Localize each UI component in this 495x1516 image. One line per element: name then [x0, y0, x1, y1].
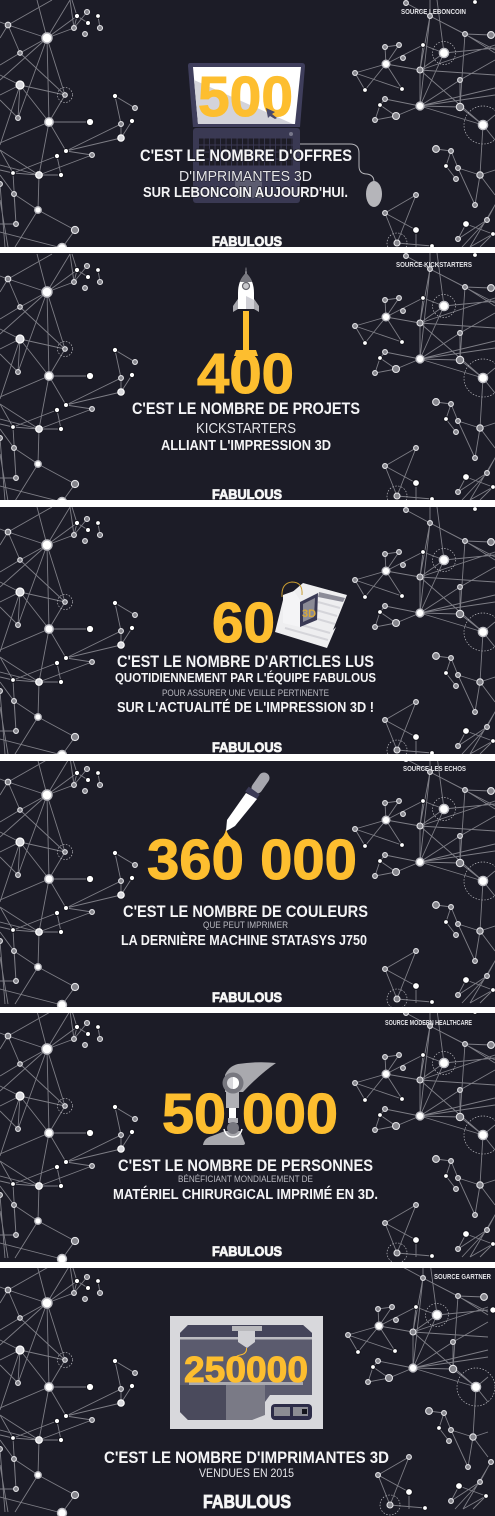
icon: prosthetic leg [203, 1062, 276, 1145]
text block: description: C'EST LE NOMBRE DE PROJETS [132, 400, 360, 418]
number: 250 000: 250000 [184, 1349, 308, 1390]
text block: description: ALLIANT L'IMPRESSION 3D [161, 438, 331, 454]
text block: description: QUOTIDIENNEMENT PAR L'ÉQUIPE FABULOUS [115, 670, 376, 685]
icon: newspaper with 3D printer: 3D [302, 608, 316, 620]
panel: 500 offers on Leboncoin [0, 0, 495, 253]
panel: 250 000 printers [0, 1262, 495, 1516]
text block: description [122, 906, 368, 945]
text block: description: MATÉRIEL CHIRURGICAL IMPRIMÉ EN 3D. [113, 1186, 378, 1203]
text block: description [114, 1160, 378, 1199]
icon: 3D printer [170, 1316, 323, 1429]
number: 60: 60 [212, 591, 275, 655]
text block: description [140, 147, 352, 201]
icon: dropper [219, 778, 264, 845]
icon: mouse cursor [266, 108, 277, 119]
text block: description: C'EST LE NOMBRE DE PERSONNES [118, 1157, 373, 1175]
logo: Fabulous: FABULOUS [203, 1492, 291, 1512]
text block: description: C'EST LE NOMBRE DE COULEURS [123, 903, 368, 921]
number: 400: 400 [197, 342, 294, 406]
source label: SOURCE LEBONCOIN [401, 7, 466, 16]
logo: Fabulous: FABULOUS [212, 233, 282, 249]
logo: Fabulous: FABULOUS [212, 486, 282, 502]
logo: Fabulous: FABULOUS [212, 1243, 282, 1259]
icon: rocket with flame [233, 267, 259, 356]
text block: description: SUR L'ACTUALITÉ DE L'IMPRESSION 3D ! [117, 699, 374, 716]
text block: description: LA DERNIÈRE MACHINE STATASYS J750 [121, 932, 367, 949]
source label: SOURCE KICKSTARTERS [396, 260, 472, 269]
text block: description: C'EST LE NOMBRE D'OFFRES [140, 147, 352, 165]
text block: description: POUR ASSURER UNE VEILLE PERTINENTE [162, 688, 329, 698]
text block: description [132, 402, 360, 450]
text block: description: D'IMPRIMANTES 3D [179, 168, 312, 185]
text block: description: KICKSTARTERS [196, 420, 296, 437]
text block: description: C'EST LE NOMBRE D'ARTICLES LUS [117, 653, 374, 671]
panel: 50 000 people [0, 1010, 495, 1264]
panel: 400 Kickstarter projects [0, 253, 495, 506]
icon: newspaper with 3D printer [275, 582, 347, 648]
panel: 60 articles read [0, 507, 495, 760]
text block: description: C'EST LE NOMBRE D'IMPRIMANTES 3D [104, 1449, 389, 1467]
panel: 360 000 colours [0, 756, 495, 1010]
text block: description [116, 656, 376, 712]
text block: description [104, 1452, 388, 1477]
text block: description: SUR LEBONCOIN AUJOURD'HUI. [143, 185, 348, 201]
number: 500: 500 [198, 65, 293, 129]
text block: description: QUE PEUT IMPRIMER [203, 920, 288, 930]
number: 360 000: 360 000 [147, 828, 357, 892]
text block: description: VENDUES EN 2015 [199, 1466, 294, 1480]
source label: SOURCE LES ECHOS [403, 764, 466, 773]
logo: Fabulous: FABULOUS [212, 739, 282, 755]
logo: Fabulous: FABULOUS [212, 989, 282, 1005]
icon: laptop with mouse [188, 63, 382, 207]
number: 50 000: 50 000 [162, 1082, 338, 1146]
text block: description: BÉNÉFICIANT MONDIALEMENT DE [178, 1174, 313, 1184]
